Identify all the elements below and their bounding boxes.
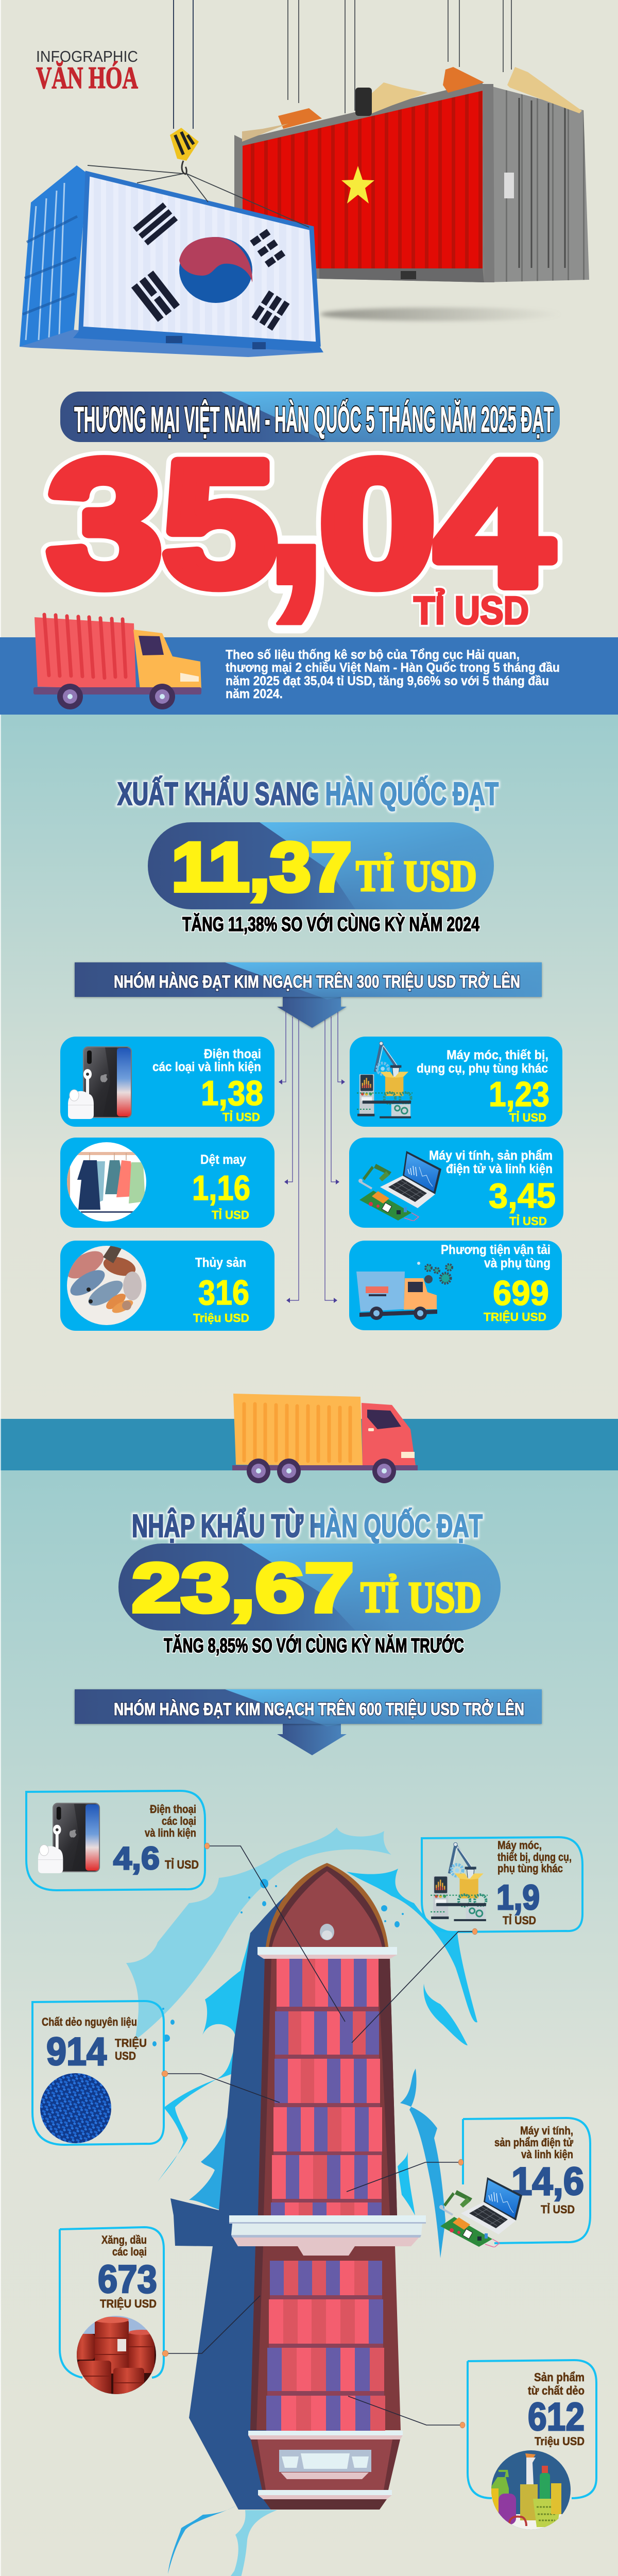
card: vehicles export: Phương tiện vận tải: [441, 1243, 551, 1257]
card: seafood export: [60, 1241, 274, 1331]
connectors: export categories: [279, 1012, 345, 1303]
card: computers export: [349, 1138, 563, 1228]
illustration: container ship with water splash: [126, 1827, 477, 2576]
icon: orange delivery truck: [232, 1394, 418, 1483]
callout: machinery import: phụ tùng khác: [497, 1862, 563, 1875]
subheading: export growth: TĂNG 11,38% SO VỚI CÙNG KỲ NĂM 2024: [182, 913, 479, 936]
callout: raw plastic import: 914: [46, 2030, 107, 2074]
headline figure: 35,04 tỉ USD: TỈ USD: [414, 589, 529, 633]
subheading: export growth: TĂNG 11,38% SO VỚI CÙNG KỲ NĂM 2024: [182, 913, 479, 936]
callout: plastic products import: [348, 2360, 596, 2530]
card: machinery export: Máy móc, thiết bị,: [447, 1048, 548, 1062]
icon: robot arm machine: [431, 1842, 488, 1921]
logo: Infographic Văn Hóa: VĂN HÓA: [36, 61, 138, 95]
callout: phones import: 4,6: [113, 1841, 160, 1876]
card: phones export: Điện thoại: [204, 1047, 261, 1061]
card: vehicles export: TRIỆU USD: [484, 1310, 546, 1324]
figure pill: export value: 11,37: [171, 829, 352, 906]
card: machinery export: 1,23: [489, 1075, 550, 1114]
callout: raw plastic import: [32, 2001, 280, 2145]
card: textiles export: TỈ USD: [212, 1207, 249, 1222]
headline figure: 35,04 tỉ USD: 04: [319, 425, 554, 623]
icon: robot arm machine: [357, 1042, 413, 1118]
callout: raw plastic import: Chất dẻo nguyên liệu: [42, 2015, 137, 2028]
callout: machinery import: [352, 1837, 582, 2043]
callout: computers import: 14,6: [511, 2160, 584, 2204]
panel: intro band: [0, 615, 618, 715]
headline figure: 35,04 tỉ USD: 04: [319, 425, 554, 623]
text block: intro: năm 2024.: [226, 687, 283, 701]
icon: clothes on rail: [67, 1142, 146, 1222]
card: textiles export: 1,16: [192, 1168, 250, 1208]
figure pill: import value: TỈ USD: [360, 1572, 482, 1622]
card: textiles export: [60, 1138, 274, 1228]
title banner: [60, 392, 560, 443]
headline figure: 35,04 tỉ USD: 35: [47, 425, 277, 623]
card: phones export: TỈ USD: [222, 1109, 260, 1124]
text block: intro: năm 2025 đạt 35,04 tỉ USD, tăng 9,66% so với 5 tháng đầu: [226, 674, 549, 688]
crane cables: [288, 0, 511, 113]
subheading: import growth: [164, 1634, 464, 1657]
icon: phone and earbuds: [38, 1803, 100, 1873]
water splash: [126, 1827, 477, 2576]
ship shadow: [170, 1863, 327, 2510]
icon: seafood: [67, 1246, 146, 1325]
container: Vietnam flag: [234, 67, 589, 282]
card: computers export: TỈ USD: [509, 1213, 547, 1228]
container: South Korea flag: [20, 165, 323, 357]
logo: Infographic Văn Hóa: [36, 47, 138, 95]
card: seafood export: 316: [198, 1273, 249, 1312]
card: computers export: Máy vi tính, sản phẩm: [429, 1148, 553, 1163]
figure pill: export value: [148, 822, 494, 909]
callout: computers import: và linh kiện: [521, 2148, 573, 2161]
headline figure: 35,04 tỉ USD: TỈ USD: [414, 589, 529, 633]
icon: laptop and circuit board: [439, 2177, 522, 2247]
text block: intro: [226, 648, 560, 701]
trigrams: [131, 202, 289, 331]
callout: fuel import: các loại: [112, 2245, 147, 2258]
card: machinery export: [350, 1037, 562, 1127]
card: phones export: [60, 1037, 274, 1127]
section banner: exports over 300 million: [75, 962, 542, 1028]
callout: plastic products import: từ chất dẻo: [528, 2384, 585, 2397]
card: seafood export: Triệu USD: [193, 1311, 249, 1325]
crane hook and cables: [88, 0, 309, 227]
callout: phones import: các loại: [162, 1815, 196, 1827]
callout: phones import: và linh kiện: [145, 1826, 196, 1839]
cargo containers: [266, 1959, 385, 2431]
callout: plastic products import: Triệu USD: [535, 2435, 585, 2448]
section banner: imports over 600 million: [75, 1689, 542, 1755]
callout: phones import: [26, 1791, 345, 2022]
figure pill: import value: [118, 1544, 501, 1631]
callout: raw plastic import: USD: [115, 2049, 136, 2062]
ship deck and bridge: [229, 2215, 426, 2510]
callout: machinery import: TỈ USD: [503, 1914, 536, 1927]
card: vehicles export: [349, 1241, 562, 1330]
card: phones export: 1,38: [201, 1074, 263, 1113]
card: computers export: điện tử và linh kiện: [446, 1162, 553, 1176]
callout: phones import: Điện thoại: [150, 1803, 196, 1816]
icon: phone and earbuds: [68, 1046, 132, 1119]
callout: phones import: TỈ USD: [165, 1857, 199, 1871]
figure pill: export value: TỈ USD: [356, 851, 477, 901]
icon: laptop and circuit board: [358, 1151, 441, 1221]
card: vehicles export: 699: [493, 1274, 549, 1313]
callout: machinery import: 1,9: [496, 1878, 540, 1917]
card: computers export: 3,45: [489, 1176, 556, 1215]
callout: computers import: [347, 2118, 590, 2247]
text block: intro: thương mại 2 chiều Việt Nam - Hàn Quốc trong 5 tháng đầu: [226, 660, 560, 675]
callout: fuel import: 673: [98, 2258, 157, 2301]
figure pill: import value: 23,67: [132, 1550, 354, 1626]
hero: shipping containers illustration: [20, 0, 589, 357]
card: phones export: các loại và linh kiện: [152, 1060, 261, 1074]
icon: plastic pellets: [40, 2073, 111, 2143]
card: machinery export: dụng cụ, phụ tùng khác: [417, 1061, 548, 1076]
callout: machinery import: Máy móc,: [497, 1839, 542, 1852]
icon: plastic household products: [491, 2450, 571, 2530]
icon: oil barrels: [77, 2316, 156, 2394]
callout: computers import: TỈ USD: [541, 2203, 575, 2216]
card: vehicles export: và phụ tùng: [484, 1256, 551, 1270]
headline figure: 35,04 tỉ USD: ,: [260, 350, 332, 638]
ship hull: [250, 1863, 401, 2430]
callout: plastic products import: 612: [528, 2395, 585, 2439]
callout: computers import: sản phẩm điện tử: [494, 2136, 573, 2149]
card: machinery export: TỈ USD: [509, 1110, 546, 1124]
headline figure: 35,04 tỉ USD: ,: [260, 350, 332, 638]
headline figure: 35,04 tỉ USD: 35: [47, 425, 277, 623]
headline figure: 35,04 tỉ USD: [47, 350, 554, 638]
taegeuk symbol: [179, 237, 252, 303]
text block: intro: Theo số liệu thống kê sơ bộ của Tổng cục Hải quan,: [226, 648, 520, 662]
callout: plastic products import: Sản phẩm: [534, 2370, 585, 2384]
callout: machinery import: thiết bị, dụng cụ,: [497, 1851, 572, 1863]
subheading: import growth: TĂNG 8,85% SO VỚI CÙNG KỲ NĂM TRƯỚC: [164, 1634, 464, 1657]
card: textiles export: Dệt may: [200, 1153, 246, 1167]
icon: red and yellow truck: [33, 615, 201, 709]
logo: Infographic Văn Hóa: INFOGRAPHIC: [36, 47, 138, 65]
callout: fuel import: Xăng, dầu: [101, 2233, 147, 2246]
callout: raw plastic import: TRIỆU: [115, 2037, 147, 2049]
callout: fuel import: TRIỆU USD: [100, 2297, 157, 2310]
callout: computers import: Máy vi tính,: [520, 2124, 573, 2137]
icon: truck and gears: [356, 1262, 452, 1320]
card: seafood export: Thủy sản: [195, 1256, 246, 1270]
subheading: import growth: TĂNG 8,85% SO VỚI CÙNG KỲ NĂM TRƯỚC: [164, 1634, 464, 1657]
callout: fuel import: [60, 2227, 260, 2399]
